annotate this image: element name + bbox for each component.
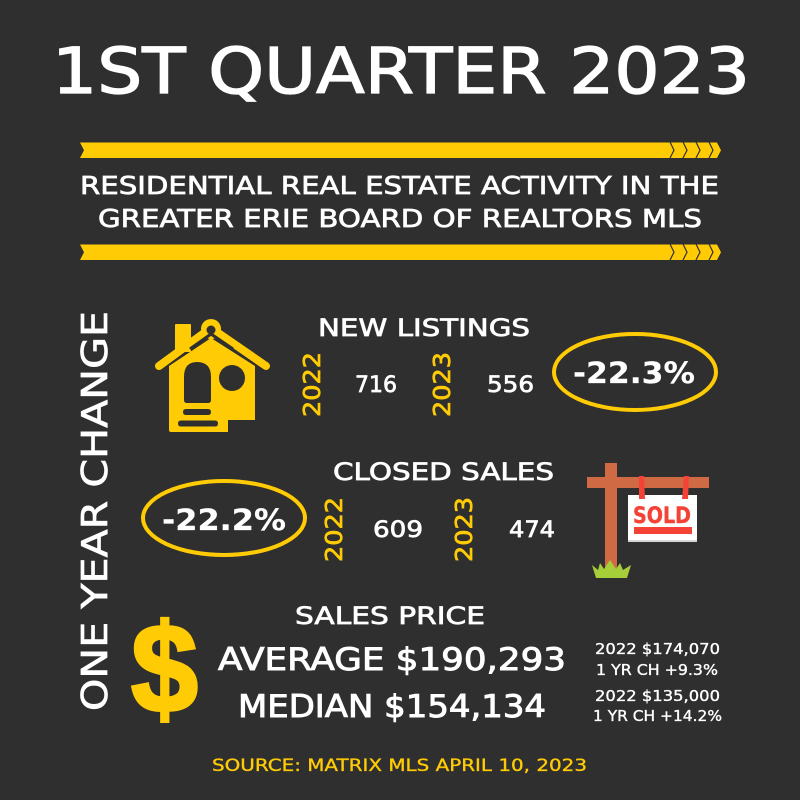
- closed sales figures: 2022: [322, 497, 348, 562]
- new listings figures: 716: [355, 373, 397, 398]
- callout: -22.3%: -22.3%: [573, 356, 695, 390]
- new listings figures: [300, 352, 534, 417]
- new listings figures: 2022: [300, 352, 326, 417]
- callout: -22.3%: [554, 334, 716, 410]
- median comparison note: [593, 687, 722, 725]
- closed sales figures: 609: [373, 518, 423, 543]
- icon: dollar sign: $: [131, 598, 198, 739]
- bottom yellow arrow banner: [80, 244, 721, 260]
- closed sales figures: 474: [509, 518, 555, 543]
- closed sales figures: 2023: [452, 497, 478, 562]
- title: 1ST QUARTER 2023: [52, 35, 750, 108]
- icon: sold sign: SOLD: [633, 504, 691, 529]
- subtitle: RESIDENTIAL REAL ESTATE ACTIVITY IN THE: [80, 171, 719, 200]
- vertical heading: one year change: ONE YEAR CHANGE: [75, 311, 116, 711]
- icon: sold sign: [587, 463, 709, 578]
- callout: -22.2%: -22.2%: [162, 503, 286, 537]
- average comparison note: 2022 $174,070: [595, 640, 720, 658]
- subtitle: GREATER ERIE BOARD OF REALTORS MLS: [98, 204, 702, 233]
- median comparison note: 1 YR CH +14.2%: [593, 707, 722, 725]
- new listings heading: NEW LISTINGS: [318, 314, 530, 342]
- new listings figures: 556: [487, 373, 534, 398]
- new listings figures: 2023: [430, 352, 456, 417]
- average comparison note: 1 YR CH +9.3%: [596, 661, 718, 679]
- icon: house: [159, 319, 266, 432]
- sales price heading: SALES PRICE: [295, 602, 485, 630]
- median price: MEDIAN $154,134: [238, 689, 546, 725]
- top yellow arrow banner: [80, 142, 721, 158]
- closed sales figures: [322, 497, 555, 562]
- average comparison note: [595, 640, 720, 679]
- source note: SOURCE: MATRIX MLS APRIL 10, 2023: [212, 756, 587, 776]
- closed sales heading: CLOSED SALES: [333, 458, 554, 486]
- average price: AVERAGE $190,293: [218, 642, 566, 678]
- subtitle: [80, 171, 719, 233]
- median comparison note: 2022 $135,000: [595, 687, 720, 705]
- callout: -22.2%: [143, 481, 305, 555]
